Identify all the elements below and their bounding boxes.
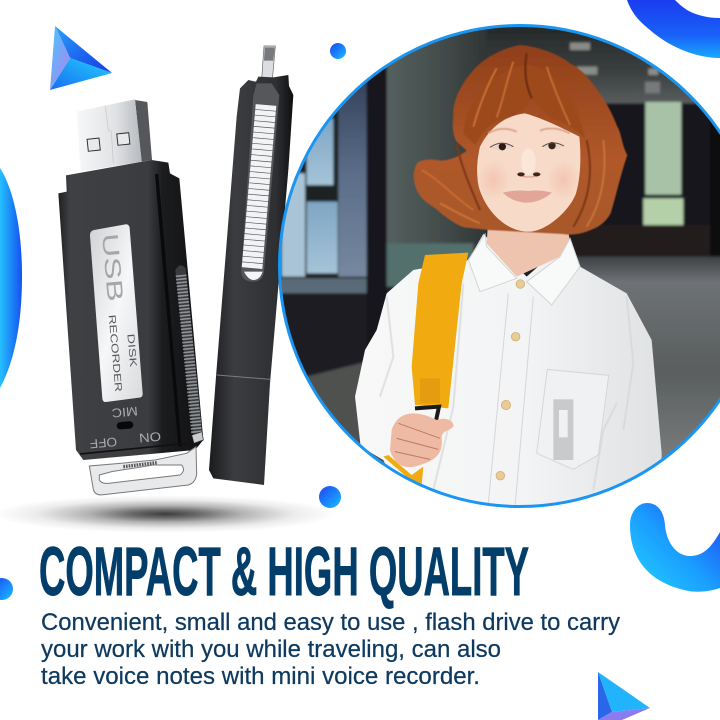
shirt pocket — [537, 369, 609, 469]
photo circle border — [280, 26, 720, 506]
strap buckle — [415, 407, 439, 421]
yellow backpack strap — [383, 253, 468, 485]
label text: DISK — [124, 333, 138, 368]
label text: USB — [97, 232, 129, 303]
collar — [468, 234, 580, 305]
hair strands — [422, 53, 604, 227]
finger lines — [395, 423, 440, 459]
hair back — [414, 45, 627, 235]
neck — [486, 229, 570, 276]
device: usb recorder with cap off — [58, 99, 203, 495]
description text: take voice notes with mini voice recorder. — [41, 663, 480, 690]
recorder body — [58, 160, 203, 460]
face — [477, 113, 580, 232]
shirt — [355, 234, 662, 510]
label text — [97, 232, 138, 392]
description text: Convenient, small and easy to use , flash drive to carry — [41, 609, 620, 636]
eyes — [488, 128, 570, 150]
dot: near circle bottom — [319, 486, 341, 508]
circular photo — [267, 23, 720, 523]
cheek shading — [483, 168, 574, 192]
mic slot — [116, 421, 134, 430]
mouth — [503, 190, 552, 203]
fringe — [464, 112, 584, 144]
usb plug — [77, 99, 152, 172]
dot: top — [330, 43, 346, 59]
buttons — [496, 280, 525, 480]
description text: your work with you while traveling, can also — [41, 636, 501, 663]
key ring clip — [89, 447, 197, 495]
dot: left edge — [0, 578, 13, 600]
drop shadow under devices — [0, 495, 337, 533]
on label: ON — [138, 429, 162, 445]
blob: left half ellipse — [0, 168, 22, 388]
shirt wrinkles — [380, 283, 633, 490]
ribbed side slider — [175, 265, 203, 443]
corridor background — [281, 27, 720, 464]
usb recorder devices — [58, 46, 293, 495]
off label: OFF — [89, 434, 118, 451]
nose — [516, 148, 542, 177]
silver label — [90, 224, 143, 402]
hand — [390, 413, 453, 467]
recorder in pocket — [553, 399, 573, 460]
device: usb cap with clip — [209, 46, 293, 485]
mic label: MIC — [111, 404, 138, 420]
label text: RECORDER — [106, 314, 123, 392]
ribbed slot — [241, 83, 279, 282]
placket — [488, 293, 533, 507]
cap body — [209, 75, 293, 485]
icon: bottom-right triangle — [598, 672, 650, 720]
blob: bottom-right U shape — [630, 503, 720, 592]
description text — [41, 609, 620, 690]
blob: top-right crescent — [627, 0, 720, 58]
icon: top-left triangle — [50, 26, 112, 90]
seam — [217, 375, 271, 379]
photo circle: boy with backpack — [267, 23, 720, 523]
cap top clip — [261, 46, 275, 84]
